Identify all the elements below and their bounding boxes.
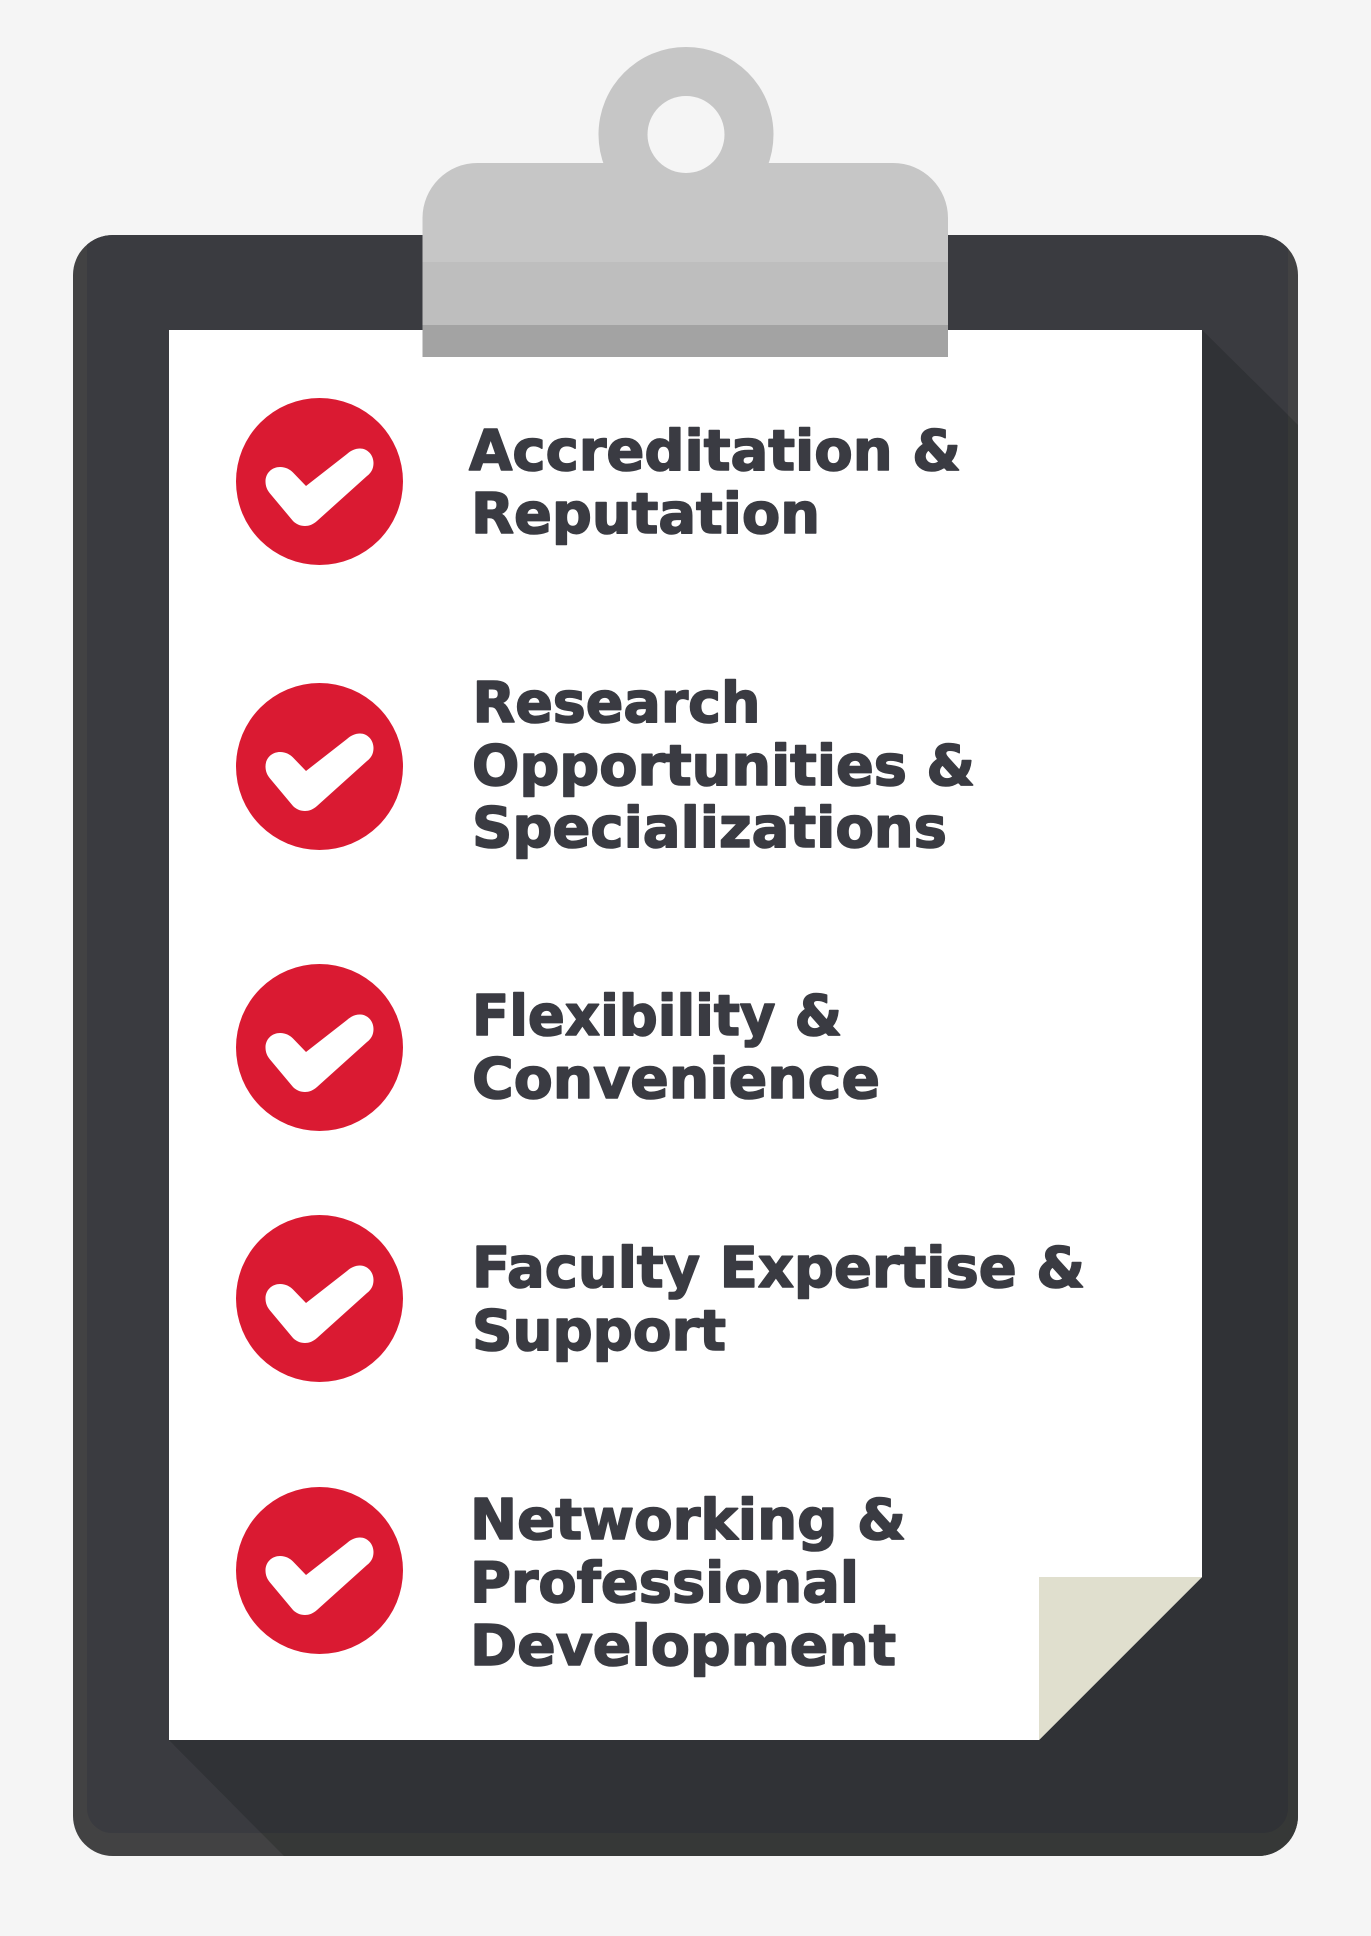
label: Flexibility & Convenience: Flexibility &: [472, 984, 842, 1049]
icon: check mark: [236, 1215, 403, 1382]
label: Accreditation & Reputation: Accreditation &: [469, 419, 961, 484]
label: Flexibility & Convenience: Convenience: [472, 1047, 880, 1112]
label: Faculty Expertise & Support: Faculty Expertise &: [472, 1236, 1085, 1301]
label: Networking & Professional Development: Development: [470, 1614, 896, 1679]
label: Research Opportunities & Specializations: Research: [472, 671, 760, 736]
clipboard board: [73, 225, 1298, 1856]
icon: check mark: [236, 683, 403, 850]
checklist item: Faculty Expertise & Support: [236, 1215, 1085, 1382]
label: Research Opportunities & Specializations: Opportunities &: [472, 734, 975, 799]
label: Networking & Professional Development: [470, 1488, 906, 1679]
label: Faculty Expertise & Support: [472, 1236, 1085, 1364]
icon: check mark: [236, 964, 403, 1131]
clip ring: [598, 47, 774, 222]
clip hole: [648, 96, 724, 173]
checklist item: Flexibility & Convenience: [236, 964, 880, 1131]
folded paper corner: [1039, 1577, 1202, 1740]
label: Research Opportunities & Specializations: Specializations: [472, 796, 947, 861]
label: Networking & Professional Development: Networking &: [470, 1488, 906, 1553]
icon: check mark: [236, 1487, 403, 1654]
checklist item: Networking & Professional Development: [236, 1487, 906, 1679]
label: Networking & Professional Development: Professional: [470, 1551, 859, 1616]
label: Flexibility & Convenience: [472, 984, 880, 1112]
icon: check mark: [236, 398, 403, 565]
label: Faculty Expertise & Support: Support: [472, 1299, 726, 1364]
label: Accreditation & Reputation: Reputation: [471, 482, 820, 547]
checklist item: Accreditation & Reputation: [236, 398, 961, 565]
paper sheet: [169, 330, 1202, 1740]
label: Accreditation & Reputation: [469, 419, 961, 547]
checklist item: Research Opportunities & Specializations: [236, 671, 975, 861]
label: Research Opportunities & Specializations: [472, 671, 975, 861]
metal clip: [422, 47, 948, 357]
clip body: [422, 163, 948, 262]
